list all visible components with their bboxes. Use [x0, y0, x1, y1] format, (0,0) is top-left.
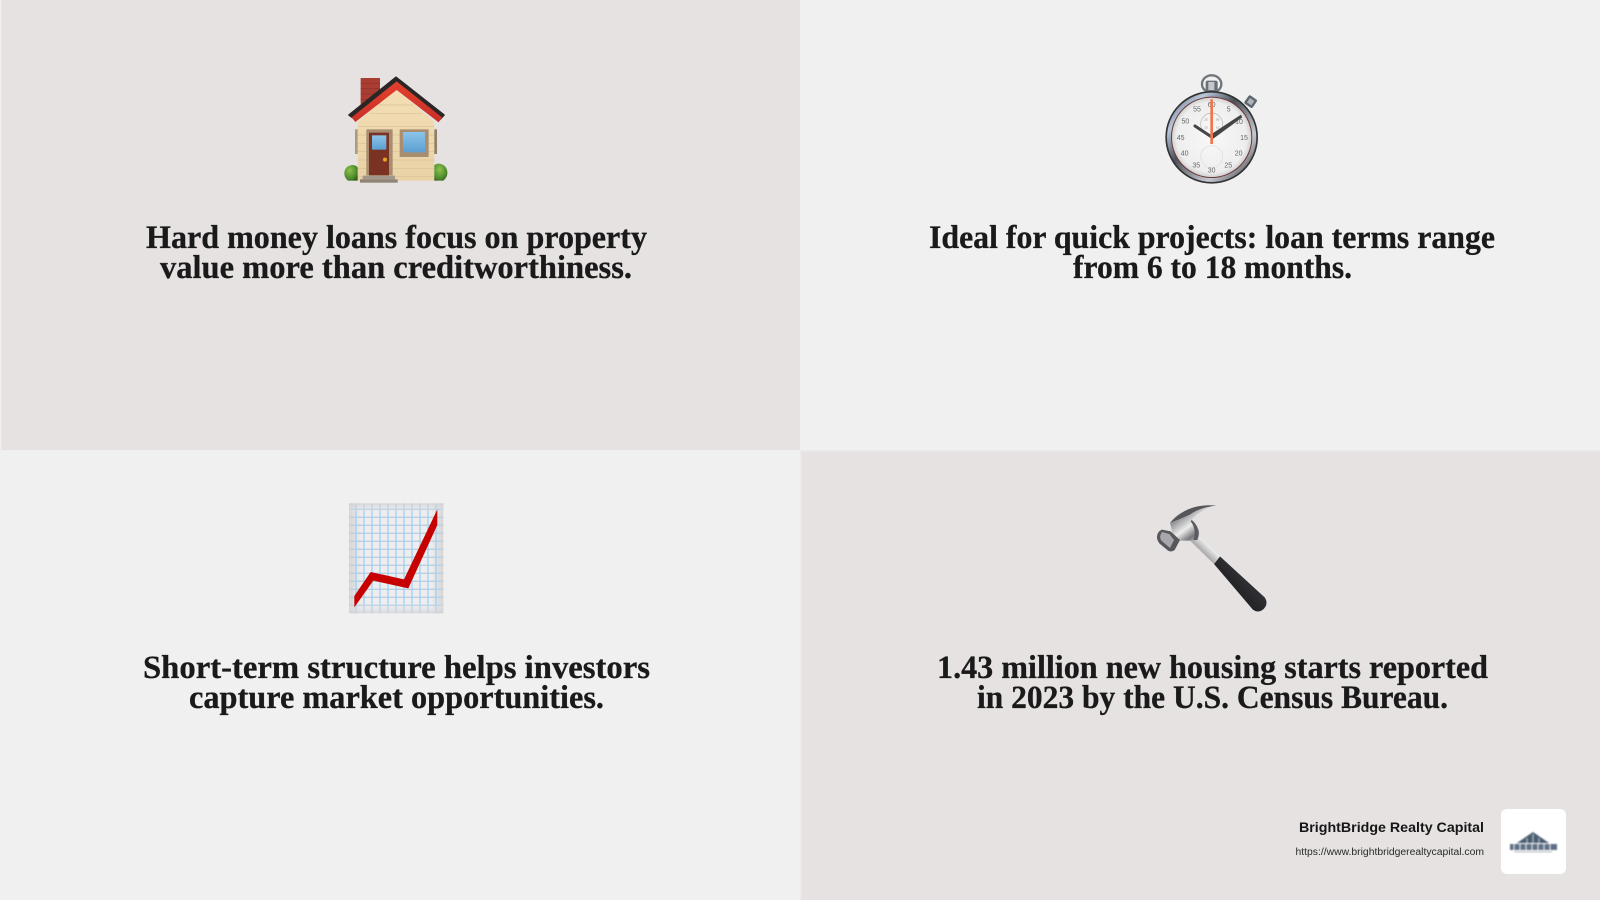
heading: market opportunities: Short-term structure helps investors [143, 650, 650, 686]
icon: stopwatch: 5 [1227, 107, 1231, 114]
icon: stopwatch: 10 [1235, 119, 1243, 126]
icon: stopwatch: 10 [1216, 125, 1220, 129]
icon: stopwatch: 35 [1192, 163, 1200, 170]
panel: housing starts [800, 450, 1600, 900]
logo [1501, 809, 1566, 874]
icon: stopwatch: 15 [1240, 135, 1248, 142]
icon: stopwatch: 20 [1235, 151, 1243, 158]
icon: stopwatch [1165, 75, 1258, 184]
icon: stopwatch: 55 [1193, 107, 1201, 114]
panel: quick projects [800, 0, 1600, 450]
heading: housing starts: in 2023 by the U.S. Census Bureau. [977, 680, 1448, 716]
heading: property value [146, 220, 647, 286]
heading: housing starts [937, 650, 1488, 716]
icon: stopwatch: 20 [1204, 125, 1208, 129]
footer: website url: https://www.brightbridgerealtycapital.com [1296, 847, 1484, 858]
icon: stopwatch: 25 [1224, 163, 1232, 170]
icon: hammer [1157, 505, 1267, 611]
icon: house [344, 77, 447, 183]
heading: market opportunities [143, 650, 650, 716]
icon: stopwatch: 05 [1216, 118, 1220, 122]
heading: property value: value more than creditworthiness. [160, 250, 632, 286]
heading: property value: Hard money loans focus on property [146, 220, 647, 256]
panel: property value [0, 0, 800, 450]
panel: market opportunities [0, 450, 800, 900]
icon: stopwatch: 25 [1204, 118, 1208, 122]
icon: stopwatch: 50 [1181, 119, 1189, 126]
heading: quick projects [929, 220, 1495, 286]
icon: stopwatch: 60 [1208, 102, 1216, 109]
heading: market opportunities: capture market opportunities. [189, 680, 604, 716]
icon: rising chart [349, 503, 443, 613]
footer: company name: BrightBridge Realty Capital [1299, 819, 1484, 835]
heading: housing starts: 1.43 million new housing starts reported [937, 650, 1488, 686]
icon: stopwatch: 30 [1208, 168, 1216, 175]
heading: quick projects: Ideal for quick projects: loan terms range [929, 220, 1495, 256]
icon: stopwatch: 45 [1177, 135, 1185, 142]
heading: quick projects: from 6 to 18 months. [1073, 250, 1352, 286]
icon: stopwatch: 40 [1181, 151, 1189, 158]
